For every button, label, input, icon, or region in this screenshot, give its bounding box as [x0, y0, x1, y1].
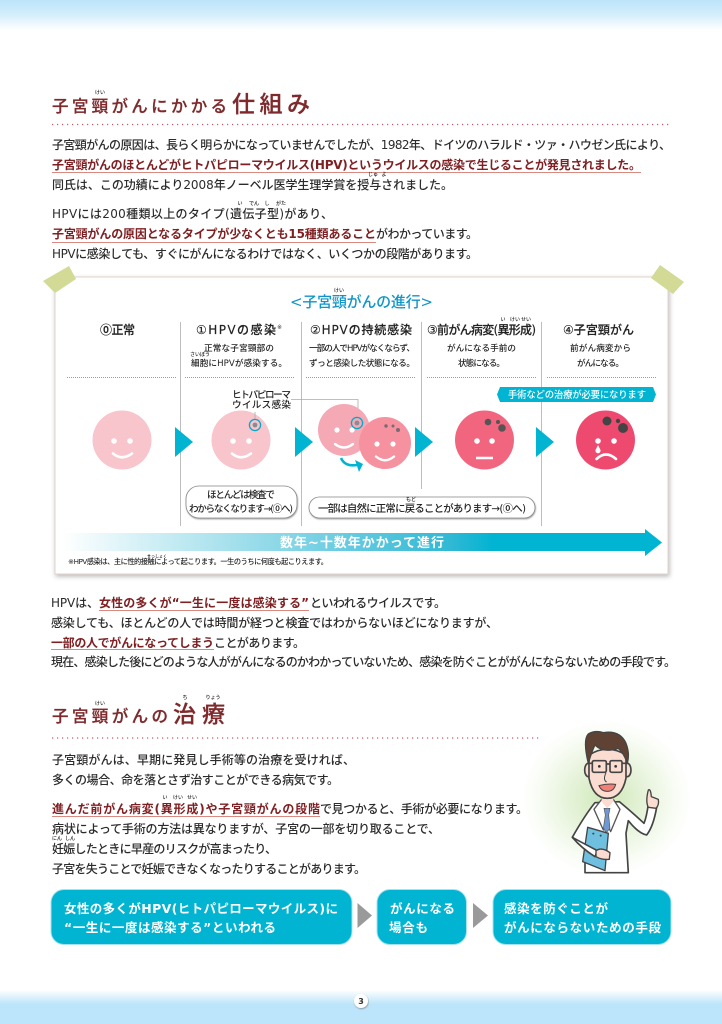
coat — [572, 802, 657, 873]
text block: HPV is common: といわれるウイルスです。 — [310, 596, 446, 610]
heading: how cervical cancer develops: 子宮頸がんにかかる — [52, 96, 227, 116]
column descriptions: 細胞にHPVが感染する。 — [191, 357, 287, 369]
text block: HPV is common: 感染しても、ほとんどの人では時間が経つと検査ではわからないほどになりますが、 — [51, 615, 498, 630]
callout: most become undetectable — [186, 486, 297, 518]
icon: left tape — [43, 266, 76, 293]
column descriptions: がんになる手前の — [447, 342, 516, 354]
footnote: ※HPV感染は、主に性的接触によって起こります。一生のうちに何度も起こりえます。 — [68, 557, 328, 566]
panel title: けい — [334, 288, 344, 294]
heading: treatment: ち — [182, 695, 188, 701]
neck — [602, 793, 613, 808]
column descriptions — [190, 342, 631, 369]
collar and shirt — [594, 799, 620, 832]
label: HPV infection callout: ウイルス感染 — [232, 399, 291, 411]
face: precancerous lesion — [455, 410, 514, 470]
progress arrow — [62, 529, 662, 556]
callout: most become undetectable: ほとんどは検査で — [207, 489, 275, 501]
face: HPV infection — [212, 410, 270, 470]
face: persistent infection, first — [318, 404, 370, 456]
text block: cause of cervical cancer: じゅ — [368, 172, 378, 178]
column descriptions: ずっと感染した状態になる。 — [309, 357, 415, 369]
heading: how cervical cancer develops — [52, 90, 310, 118]
text block: HPV types: HPVに感染しても、すぐにがんになるわけではなく、いくつかの段階があります。 — [52, 246, 478, 261]
text block: surgery details: 子宮を失うことで妊娠できなくなったりすることがあります。 — [52, 861, 366, 876]
text block: surgery details: い — [162, 795, 168, 801]
label: HPV infection callout — [232, 390, 358, 419]
left sleeve and hand — [572, 837, 597, 857]
column heads: ③前がん病変(異形成) — [427, 322, 536, 337]
text block: surgery details: 進んだ前がん病変(異形成)や子宮頸がんの段階 — [52, 801, 320, 816]
panel: progression of cervical cancer — [43, 265, 684, 574]
heading: treatment: りょう — [205, 695, 221, 701]
column descriptions: 一部の人でHPVがなくならず、 — [309, 342, 415, 354]
column heads: ④子宮頸がん — [563, 322, 634, 337]
column heads: ①HPVの感染 — [196, 322, 276, 337]
clipboard — [583, 827, 608, 871]
text block: surgery details: にん — [52, 836, 62, 842]
pointing hand — [647, 790, 659, 808]
footnote — [68, 552, 328, 566]
summary box: HPV common — [51, 890, 352, 944]
face: normal — [92, 410, 152, 470]
mouth — [599, 784, 616, 791]
text block: cause of cervical cancer: 同氏は、この功績により2008年ノーベル医学生理学賞を授与されました。 — [52, 177, 453, 192]
text block: HPV types — [52, 200, 478, 261]
callout: some return to normal — [309, 496, 535, 518]
page number: 3 — [358, 997, 364, 1006]
callout: some return to normal: 一部は自然に正常に戻ることがあります→(⓪へ) — [318, 502, 526, 515]
text block: surgery details: 妊娠したときに早産のリスクが高まったり、 — [52, 841, 277, 856]
illustration: doctor — [522, 720, 692, 877]
column descriptions: 状態になる。 — [458, 357, 505, 369]
icon: curved arrow — [341, 458, 363, 472]
summary box: may become cancer — [377, 890, 466, 944]
summary box: HPV common: 女性の多くがHPV(ヒトパピローマウイルス)に — [64, 901, 338, 916]
column descriptions: 前がん病変から — [570, 342, 631, 354]
text block: surgery details — [52, 795, 528, 876]
text block: HPV types: し — [264, 201, 270, 207]
face: cervical cancer — [576, 410, 635, 470]
text block: HPV is common: 一部の人でがんになってしまう — [51, 635, 214, 650]
text block: cause of cervical cancer: 子宮頸がんのほとんどがヒトパピローマウイルス(HPV)というウイルスの感染で生じることが発見されました。 — [52, 157, 641, 172]
glasses — [588, 761, 627, 772]
face: persistent infection, second — [359, 417, 411, 469]
heading: treatment: 治療 — [173, 702, 225, 728]
banner: treatment required: 手術などの治療が必要になります — [508, 389, 646, 401]
text block: HPV is common: 現在、感染した後にどのような人ががんになるのかわかっていないため、感染を防ぐことががんにならないための手段です。 — [51, 654, 676, 669]
summary box: may become cancer: 場合も — [389, 920, 428, 935]
column heads — [100, 317, 634, 337]
text block: treatment intro: 多くの場合、命を落とさず治すことができる病気です。 — [52, 772, 339, 787]
banner: treatment required — [497, 387, 656, 402]
text block: HPV is common — [51, 595, 676, 669]
arrow — [473, 903, 488, 928]
arrow — [295, 427, 313, 457]
text block: cause of cervical cancer: 子宮頸がんの原因は、長らく明らかになっていませんでしたが、1982年、ドイツのハラルド・ツァ・ハウゼン氏により、 — [52, 137, 671, 152]
arrow — [175, 427, 193, 457]
arrow — [358, 903, 372, 928]
column dividers — [180, 322, 542, 526]
panel title: <子宮頸がんの進行> — [290, 293, 433, 311]
top background band — [0, 0, 722, 30]
column heads: ⓪正常 — [100, 323, 135, 337]
text block: surgery details: せい — [187, 795, 197, 801]
text block: surgery details: 病状によって手術の方法は異なりますが、子宮の一部を切り取ることで、 — [52, 821, 440, 836]
text block: surgery details: で見つかると、手術が必要になります。 — [320, 801, 528, 816]
progress arrow: 数年~十数年かかって進行 — [280, 535, 444, 551]
heading: treatment: けい — [95, 701, 105, 707]
text block: HPV is common: HPVは、 — [51, 596, 99, 610]
text block: HPV types: がた — [276, 200, 286, 207]
column heads: ②HPVの持続感染 — [310, 322, 412, 337]
summary box: HPV common: “一生に一度は感染する”といわれる — [64, 920, 276, 935]
ears — [585, 763, 592, 777]
summary box: prevention: がんにならないための手段 — [504, 920, 661, 935]
arrow — [415, 427, 433, 457]
column descriptions: がんになる。 — [577, 357, 624, 369]
heading: how cervical cancer develops: けい — [95, 90, 105, 96]
text block: surgery details: しん — [65, 836, 75, 842]
column heads: せい — [521, 317, 531, 323]
text block: surgery details: けい — [173, 795, 183, 801]
summary box: prevention: 感染を防ぐことが — [504, 901, 608, 916]
page number — [354, 994, 368, 1008]
summary box: may become cancer: がんになる — [390, 901, 455, 916]
column heads: ※ — [277, 324, 282, 331]
callout: most become undetectable: わからなくなります→(⓪へ) — [189, 504, 293, 515]
icon: right tape — [651, 265, 684, 294]
text block: HPV types: がわかっています。 — [376, 226, 478, 241]
column heads: い — [500, 317, 506, 323]
text block: HPV is common: 女性の多くが“一生に一度は感染する” — [99, 595, 309, 610]
heading: treatment: 子宮頸がんの — [52, 706, 168, 726]
arrow — [536, 427, 554, 457]
text block: cause of cervical cancer: よ — [381, 172, 387, 178]
nose — [604, 773, 607, 782]
callout: some return to normal: もど — [406, 496, 416, 503]
column descriptions: 正常な子宮頸部の — [204, 342, 274, 354]
heading: how cervical cancer develops: 仕組み — [232, 92, 310, 118]
text block: HPV types: い — [237, 201, 243, 207]
text block: HPV is common: ことがあります。 — [214, 635, 305, 650]
bottom background band — [0, 990, 722, 1024]
summary box: prevention — [493, 890, 671, 944]
label: HPV infection callout: ヒトパピローマ — [232, 390, 291, 401]
face — [589, 749, 626, 798]
text block: HPV types: 子宮頸がんの原因となるタイプが少なくとも15種類あること — [52, 226, 376, 241]
footnote: せっしょく — [147, 552, 167, 558]
column descriptions: さいぼう — [190, 351, 210, 358]
text block: treatment intro — [52, 752, 355, 787]
text block: treatment intro: 子宮頸がんは、早期に発見し手術等の治療を受ければ、 — [52, 752, 355, 767]
column heads: けい — [510, 317, 520, 323]
hair — [585, 732, 628, 763]
text block: HPV types: HPVには200種類以上のタイプ(遺伝子型)があり、 — [52, 206, 333, 221]
heading: treatment — [52, 695, 225, 728]
text block: HPV types: でん — [249, 201, 259, 207]
text block: cause of cervical cancer — [52, 137, 671, 192]
